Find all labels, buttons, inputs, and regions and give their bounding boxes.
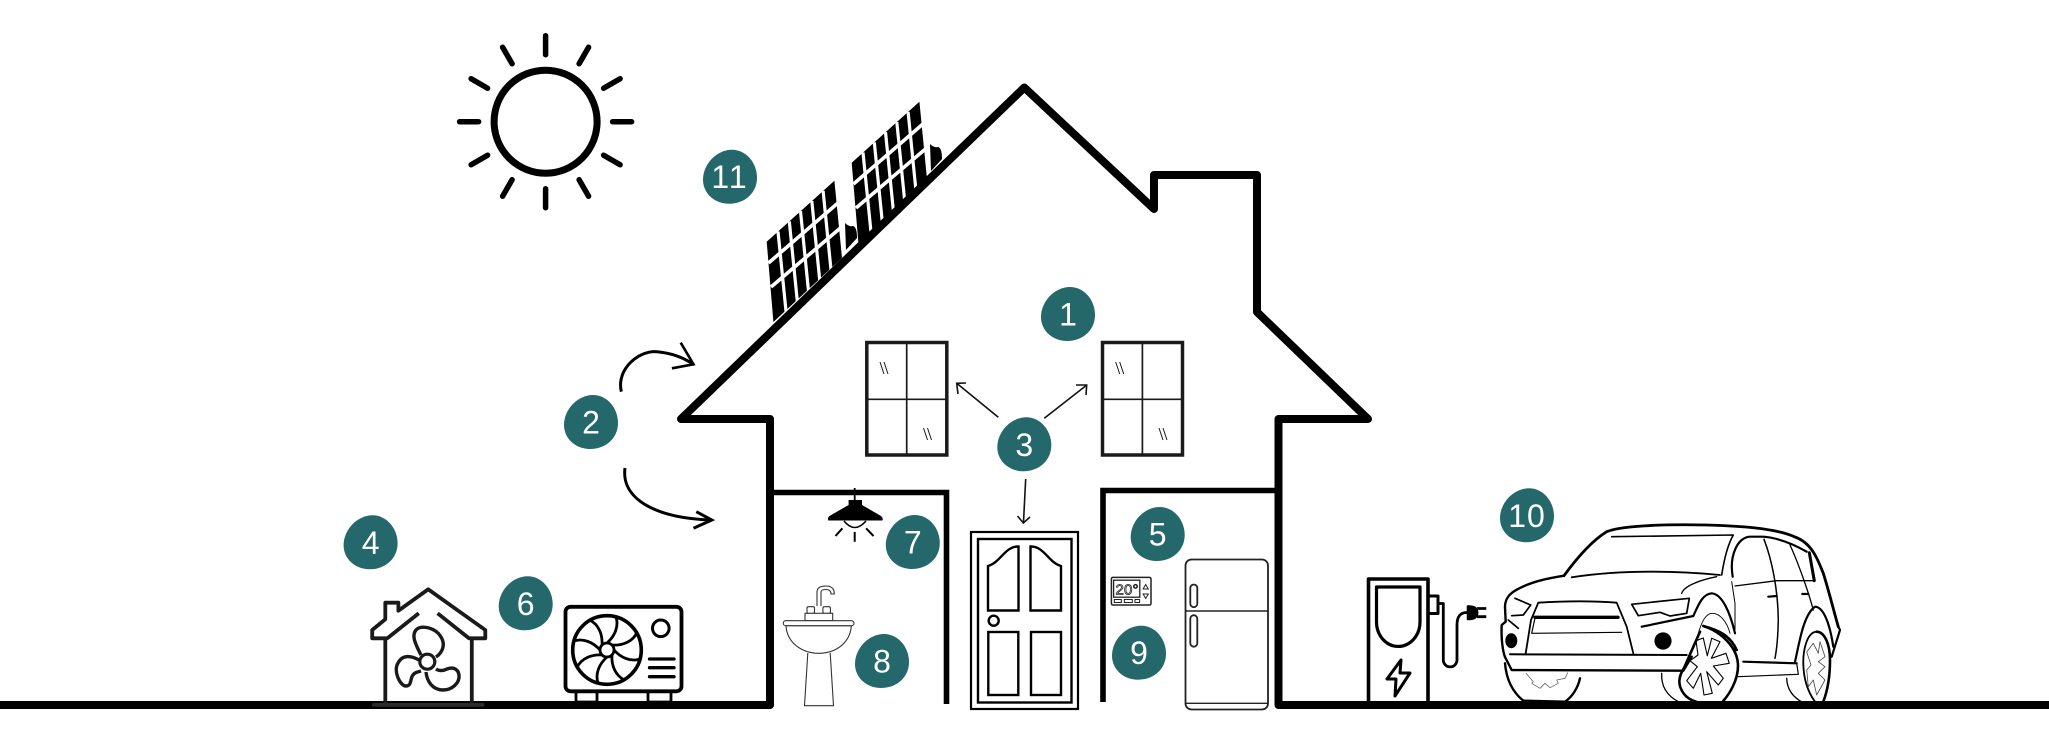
badge 5: 5 — [1149, 516, 1167, 552]
window left — [867, 342, 947, 455]
badge 3: 3 — [1015, 427, 1033, 463]
solar panel lower — [767, 181, 857, 322]
badge 1: 1 — [1059, 296, 1077, 332]
badge 9 — [1112, 626, 1166, 680]
badge 10 — [1500, 488, 1554, 542]
badge 2 — [564, 395, 618, 449]
icon: door — [971, 532, 1078, 709]
icon: sun — [460, 36, 632, 208]
badge 5 — [1131, 507, 1185, 561]
badge 7: 7 — [904, 524, 922, 560]
left room wall — [773, 492, 946, 704]
icon: solar panels — [767, 102, 942, 322]
badge 2: 2 — [582, 404, 600, 440]
badge 8: 8 — [873, 644, 891, 680]
icon: sink — [783, 586, 854, 706]
badge 8 — [855, 634, 909, 688]
arrow: to door — [1018, 479, 1030, 523]
icon: EV charger — [1368, 579, 1486, 702]
arrow: to right window — [1044, 385, 1087, 418]
badge 3 — [997, 417, 1051, 471]
badge 11 — [703, 150, 757, 204]
icon: thermostat: 20° — [1116, 582, 1138, 599]
icon: fan in a house — [372, 589, 485, 707]
badge 1 — [1041, 287, 1095, 341]
window right — [1102, 342, 1183, 455]
right room wall — [1103, 490, 1275, 702]
badge 10: 10 — [1508, 498, 1546, 534]
badge 6: 6 — [517, 586, 535, 622]
badge 11: 11 — [711, 159, 749, 195]
icon: thermostat — [1111, 577, 1151, 605]
icon: heat pump outdoor unit — [566, 607, 682, 702]
icon: fridge — [1186, 560, 1268, 710]
arrow: to left window — [957, 383, 998, 417]
badge 9: 9 — [1130, 635, 1148, 671]
icon: ceiling lamp — [828, 488, 883, 542]
badge 4 — [344, 515, 398, 569]
arrow: over the roof — [621, 343, 694, 392]
solar panel upper — [852, 102, 942, 243]
icon: electric car — [1502, 525, 1840, 703]
arrow: toward the wall — [625, 468, 712, 528]
badge 7 — [886, 515, 940, 569]
badge 6 — [499, 576, 553, 630]
badge 4: 4 — [362, 525, 379, 561]
